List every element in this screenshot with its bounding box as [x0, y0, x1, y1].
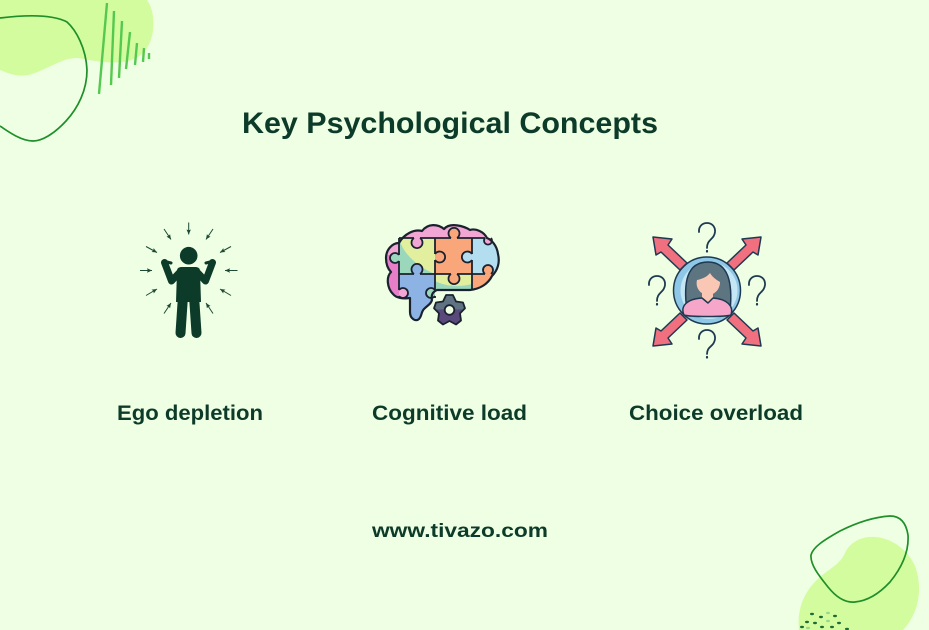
question marks	[649, 223, 765, 358]
icon: choice overload	[649, 223, 765, 358]
label: cognitive load: Cognitive load	[372, 402, 527, 425]
label: ego depletion: Ego depletion	[117, 402, 263, 425]
portrait	[674, 257, 740, 324]
icon: person under pressure	[140, 222, 238, 333]
decoration: top-left blob	[0, 0, 153, 141]
gear	[434, 295, 465, 324]
decoration: bottom-right blob	[799, 516, 919, 630]
footer url: www.tivazo.com	[371, 521, 548, 542]
icon: puzzle brain	[384, 224, 500, 326]
label: choice overload: Choice overload	[629, 402, 803, 425]
arrows	[653, 237, 761, 346]
title: Key Psychological Concepts	[242, 107, 658, 140]
